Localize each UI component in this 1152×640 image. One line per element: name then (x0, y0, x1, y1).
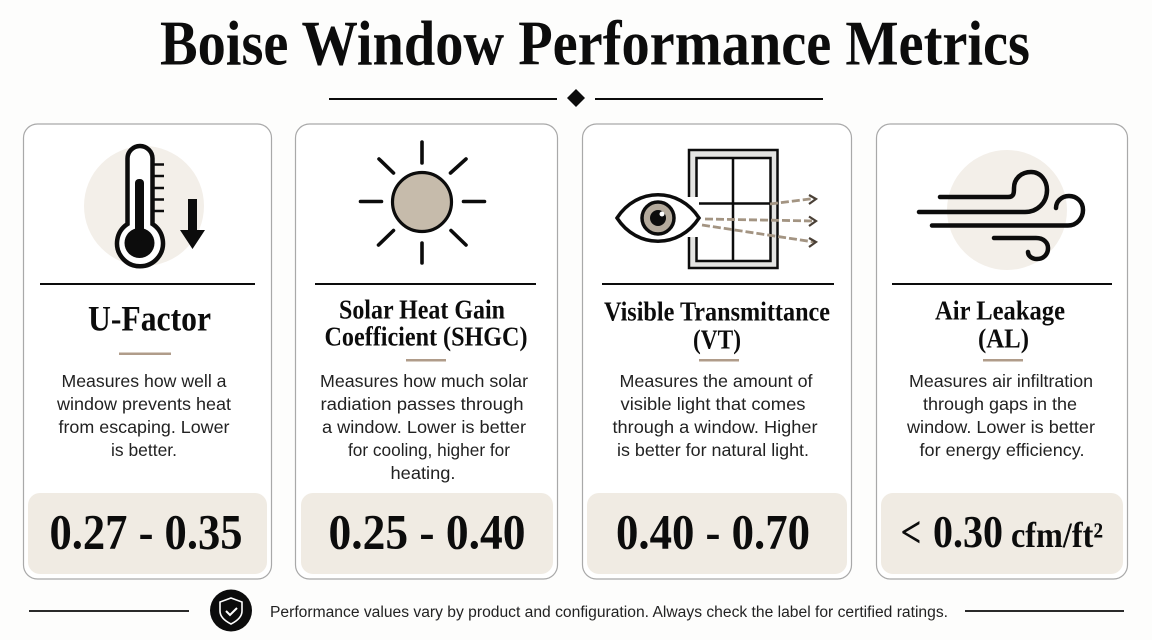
value box: 0.25 - 0.40 (328, 504, 526, 560)
description (320, 371, 528, 483)
description: Measures the amount of (620, 371, 813, 391)
panel: Visible Transmittance (582, 124, 852, 579)
footer note: Performance values vary by product and configuration. Always check the label for certified ratings. (270, 604, 948, 621)
description: Measures how well a (62, 371, 227, 391)
value box: 0.30 (933, 506, 1003, 557)
description: Measures air infiltration (909, 371, 1093, 391)
card background (24, 124, 272, 579)
panel: SHGC (296, 124, 558, 579)
description: from escaping. Lower (58, 417, 230, 437)
card background (296, 124, 558, 579)
description: for cooling, higher for (348, 440, 510, 460)
card background (582, 124, 852, 579)
heading: AL: (AL) (978, 324, 1029, 354)
description: Measures how much solar (320, 371, 528, 391)
description: is better. (111, 440, 177, 460)
icon: eye and window (617, 150, 816, 268)
value box (28, 493, 267, 574)
description: heating. (390, 463, 456, 483)
description: window. Lower is better (906, 417, 1095, 437)
panel: U-Factor (24, 124, 272, 579)
value box (587, 493, 847, 574)
heading: U-Factor: U-Factor (88, 298, 211, 338)
description: radiation passes through (320, 394, 524, 414)
heading: AL (935, 296, 1065, 354)
heading: VT (604, 296, 830, 354)
description: visible light that comes (620, 394, 806, 414)
description: through gaps in the (923, 394, 1077, 414)
heading: SHGC (324, 294, 528, 352)
footer (29, 590, 1124, 632)
icon: sun (360, 142, 484, 263)
value box (881, 493, 1123, 574)
description (906, 371, 1095, 460)
description: a window. Lower is better (322, 417, 526, 437)
title: Boise Window Performance Metrics (160, 8, 1030, 78)
heading: AL: Air Leakage (935, 296, 1065, 326)
icon: wind (919, 150, 1083, 270)
panel: Air Leakage (876, 124, 1128, 579)
description: is better for natural light. (617, 440, 809, 460)
value box: 0.40 - 0.70 (616, 504, 810, 560)
card background (876, 124, 1128, 579)
heading: SHGC: Coefficient (SHGC) (324, 322, 528, 352)
value box: 0.27 - 0.35 (50, 504, 242, 560)
value box: cfm/ft² (1011, 515, 1103, 555)
heading: SHGC: Solar Heat Gain (339, 294, 505, 324)
icon: shield check (210, 590, 252, 632)
description (56, 371, 231, 460)
heading: VT: (VT) (693, 324, 741, 354)
description: window prevents heat (56, 394, 231, 414)
value box: < (900, 508, 922, 557)
heading: VT: Visible Transmittance (604, 296, 830, 326)
title divider with diamond (329, 89, 823, 107)
icon: thermometer with down arrow (84, 146, 205, 266)
description (612, 371, 818, 460)
description: for energy efficiency. (920, 440, 1084, 460)
description: through a window. Higher (612, 417, 818, 437)
value box (301, 493, 553, 574)
